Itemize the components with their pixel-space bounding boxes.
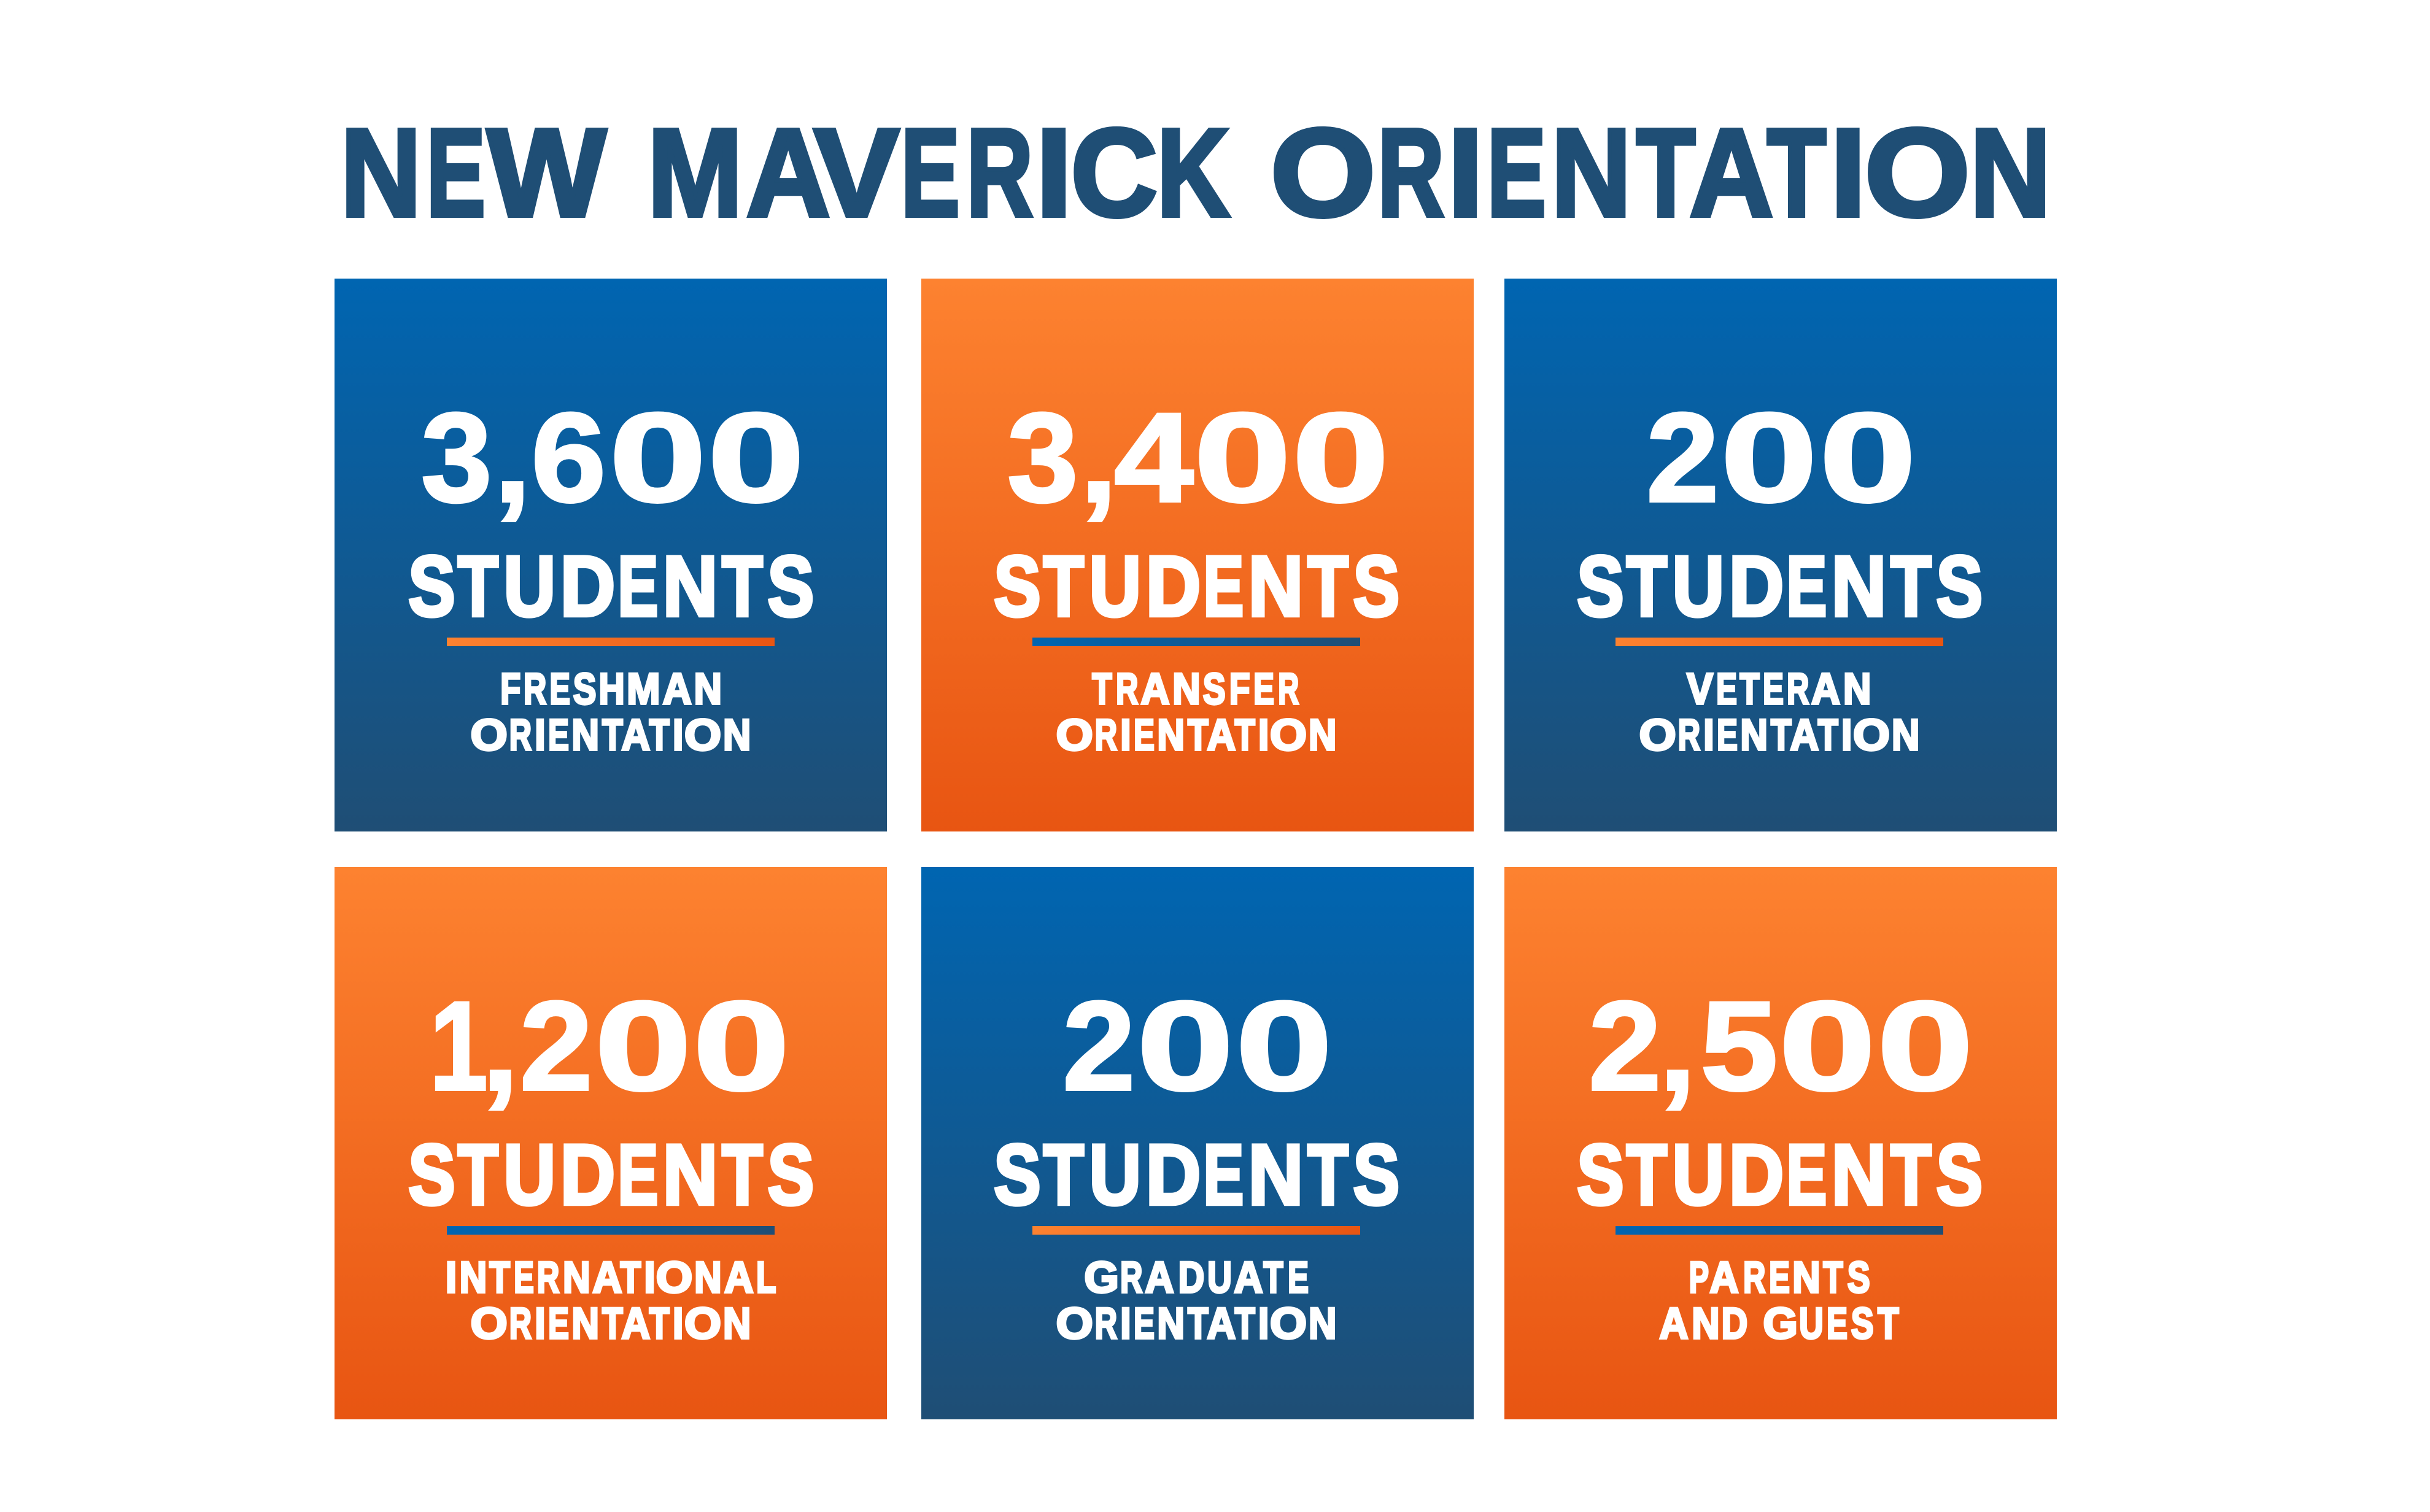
label line 1: transfer: F bbox=[1229, 665, 1250, 714]
heading: students: U bbox=[1089, 1127, 1141, 1222]
heading: students: N bbox=[1832, 538, 1886, 634]
label line 1: international: T bbox=[489, 1253, 510, 1302]
label line 2: orientation: O bbox=[1056, 711, 1093, 760]
label line 1: transfer: A bbox=[1140, 665, 1170, 714]
title: I bbox=[1448, 103, 1483, 243]
heading: students: S bbox=[1353, 1127, 1399, 1222]
heading: students: U bbox=[1672, 1127, 1724, 1222]
panel background bbox=[921, 867, 1474, 1419]
label line 2: orientation: I bbox=[1703, 711, 1714, 760]
label line 2: orientation: N bbox=[723, 711, 751, 760]
underline bar bbox=[1032, 638, 1360, 646]
label line 1: parents: N bbox=[1792, 1253, 1821, 1302]
heading: students: D bbox=[1146, 1127, 1201, 1222]
label line 1: freshman: E bbox=[550, 665, 570, 714]
label line 1: freshman: N bbox=[694, 665, 722, 714]
label line 2: and guest: N bbox=[1692, 1299, 1720, 1348]
label line 2: orientation: I bbox=[1120, 711, 1131, 760]
title: I bbox=[1036, 103, 1072, 243]
label line 1: international: R bbox=[537, 1253, 559, 1302]
label line 1: parents: R bbox=[1743, 1253, 1765, 1302]
title: E bbox=[1487, 103, 1546, 243]
label line 2: orientation: N bbox=[1157, 711, 1185, 760]
heading: students: U bbox=[1089, 538, 1141, 634]
title: T bbox=[1767, 103, 1826, 243]
label line 1: international: A bbox=[724, 1253, 754, 1302]
label line 2: orientation: R bbox=[1095, 711, 1117, 760]
label line 2: orientation: I bbox=[535, 711, 546, 760]
heading: students: E bbox=[617, 538, 658, 634]
label line 2: orientation: T bbox=[1188, 1299, 1209, 1348]
heading: students: S bbox=[1577, 1127, 1624, 1222]
label line 2: orientation: A bbox=[621, 711, 650, 760]
title: V bbox=[814, 103, 899, 243]
label line 2: orientation: E bbox=[1134, 1299, 1155, 1348]
title: N bbox=[341, 103, 421, 243]
heading: students: S bbox=[1936, 1127, 1983, 1222]
heading: students: S bbox=[994, 538, 1041, 634]
label line 1: graduate: A bbox=[1234, 1253, 1263, 1302]
number: 1,200: 2 bbox=[520, 975, 593, 1117]
panel background bbox=[1504, 867, 2057, 1419]
heading: students: S bbox=[767, 538, 814, 634]
label line 1: freshman: H bbox=[599, 665, 625, 714]
label line 1: international: E bbox=[514, 1253, 534, 1302]
panel background bbox=[335, 867, 887, 1419]
label line 2: orientation: O bbox=[471, 1299, 508, 1348]
panel: parents and guest bbox=[1504, 867, 2057, 1419]
title: R bbox=[967, 103, 1033, 243]
label line 1: veteran: E bbox=[1763, 665, 1784, 714]
number: 3,600: , bbox=[494, 387, 531, 528]
heading: students: E bbox=[1786, 1127, 1827, 1222]
heading: students: U bbox=[1672, 538, 1724, 634]
label line 1: international: N bbox=[460, 1253, 487, 1302]
number: 200: 0 bbox=[1720, 387, 1817, 528]
number: 2,500: 2 bbox=[1588, 975, 1662, 1117]
heading: students: T bbox=[1890, 538, 1932, 634]
heading: students: S bbox=[767, 1127, 814, 1222]
number: 2,500: 5 bbox=[1700, 975, 1778, 1117]
label line 1: international: T bbox=[621, 1253, 641, 1302]
label line 2: orientation: O bbox=[684, 711, 721, 760]
label line 1: parents: P bbox=[1689, 1253, 1709, 1302]
label line 2: orientation: E bbox=[548, 1299, 569, 1348]
label line 1: parents: T bbox=[1823, 1253, 1843, 1302]
label line 1: parents: S bbox=[1848, 1253, 1870, 1302]
panel background bbox=[921, 279, 1474, 831]
label line 1: veteran: N bbox=[1843, 665, 1871, 714]
label line 2: orientation: N bbox=[571, 1299, 599, 1348]
number: 3,400: 0 bbox=[1194, 387, 1291, 528]
label line 1: international: I bbox=[644, 1253, 656, 1302]
label line 2: and guest: U bbox=[1799, 1299, 1824, 1348]
title: A bbox=[746, 103, 830, 243]
heading: students: T bbox=[1307, 1127, 1348, 1222]
label line 2: orientation: R bbox=[509, 711, 532, 760]
label line 1: graduate: A bbox=[1145, 1253, 1174, 1302]
heading: students: S bbox=[408, 538, 455, 634]
title: O bbox=[1865, 103, 1970, 243]
heading: students: S bbox=[408, 1127, 455, 1222]
heading: students: D bbox=[560, 538, 615, 634]
heading: students: D bbox=[1146, 538, 1201, 634]
label line 1: graduate: E bbox=[1288, 1253, 1309, 1302]
heading: students: S bbox=[994, 1127, 1041, 1222]
panel background bbox=[335, 279, 887, 831]
label line 2: orientation: T bbox=[602, 1299, 623, 1348]
number: 3,600: 6 bbox=[531, 387, 606, 528]
label line 1: international: L bbox=[756, 1253, 776, 1302]
label line 2: orientation: T bbox=[1235, 711, 1255, 760]
title: O bbox=[1271, 103, 1376, 243]
label line 1: freshman: M bbox=[627, 665, 660, 714]
label line 2: and guest: A bbox=[1660, 1299, 1688, 1348]
label line 1: transfer: N bbox=[1172, 665, 1201, 714]
label line 2: orientation: O bbox=[1056, 1299, 1093, 1348]
label line 2: orientation: I bbox=[1841, 711, 1852, 760]
number: 1,200: 0 bbox=[693, 975, 790, 1117]
label line 1: transfer: S bbox=[1203, 665, 1226, 714]
label line 2: and guest: T bbox=[1878, 1299, 1899, 1348]
title: E bbox=[901, 103, 960, 243]
number: 3,600: 0 bbox=[708, 387, 805, 528]
label line 2: orientation: A bbox=[1207, 1299, 1236, 1348]
heading: students: T bbox=[1890, 1127, 1932, 1222]
label line 2: orientation: N bbox=[1740, 711, 1768, 760]
heading: students: S bbox=[1577, 538, 1624, 634]
heading: students: N bbox=[1248, 538, 1303, 634]
label line 2: orientation: R bbox=[1095, 1299, 1117, 1348]
label line 2: orientation: E bbox=[1134, 711, 1155, 760]
heading: students: T bbox=[1043, 1127, 1084, 1222]
label line 2: orientation: E bbox=[548, 711, 569, 760]
number: 200: 0 bbox=[1137, 975, 1234, 1117]
label line 2: orientation: O bbox=[471, 711, 508, 760]
heading: students: T bbox=[722, 538, 763, 634]
label line 2: orientation: O bbox=[1270, 711, 1307, 760]
label line 2: orientation: T bbox=[1235, 1299, 1255, 1348]
title: K bbox=[1157, 103, 1229, 243]
number: 200: 0 bbox=[1819, 387, 1916, 528]
label line 1: parents: E bbox=[1769, 1253, 1790, 1302]
heading: students: T bbox=[1627, 1127, 1667, 1222]
title: R bbox=[1378, 103, 1444, 243]
heading: students: U bbox=[503, 538, 555, 634]
heading: students: S bbox=[1936, 538, 1983, 634]
heading: students: E bbox=[1203, 538, 1244, 634]
label line 1: freshman: R bbox=[524, 665, 546, 714]
label line 1: graduate: U bbox=[1207, 1253, 1232, 1302]
label line 1: international: N bbox=[563, 1253, 590, 1302]
label line 2: orientation: N bbox=[1157, 1299, 1185, 1348]
number: 3,600: 0 bbox=[609, 387, 706, 528]
number: 2,500: 0 bbox=[1779, 975, 1876, 1117]
label line 2: orientation: I bbox=[1120, 1299, 1131, 1348]
heading: students: S bbox=[1353, 538, 1399, 634]
title: M bbox=[648, 103, 743, 243]
label line 1: veteran: T bbox=[1739, 665, 1759, 714]
label line 2: orientation: N bbox=[571, 711, 599, 760]
label line 2: orientation: O bbox=[1639, 711, 1676, 760]
label line 1: international: I bbox=[446, 1253, 457, 1302]
label line 2: and guest: E bbox=[1827, 1299, 1848, 1348]
label line 1: graduate: R bbox=[1120, 1253, 1142, 1302]
panel background bbox=[1504, 279, 2057, 831]
underline bar bbox=[447, 1226, 775, 1235]
label line 2: orientation: N bbox=[1309, 711, 1336, 760]
title: E bbox=[427, 103, 486, 243]
heading: students: E bbox=[1203, 1127, 1244, 1222]
label line 1: transfer: R bbox=[1116, 665, 1138, 714]
heading: students: D bbox=[1729, 1127, 1784, 1222]
label line 2: orientation: T bbox=[1818, 711, 1838, 760]
heading: students: T bbox=[1043, 538, 1084, 634]
number: 3,600: 3 bbox=[421, 387, 492, 528]
title: N bbox=[1552, 103, 1631, 243]
label line 1: transfer: T bbox=[1092, 665, 1112, 714]
title: I bbox=[1830, 103, 1866, 243]
label line 2: orientation: A bbox=[621, 1299, 650, 1348]
label line 2: orientation: A bbox=[1790, 711, 1819, 760]
panel: transfer orientation bbox=[921, 279, 1474, 831]
label line 2: and guest: G bbox=[1763, 1299, 1798, 1348]
title: W bbox=[487, 103, 606, 243]
label line 2: orientation: I bbox=[673, 711, 683, 760]
label line 1: veteran: V bbox=[1687, 665, 1713, 714]
heading: students: N bbox=[663, 1127, 718, 1222]
number: 200: 0 bbox=[1236, 975, 1333, 1117]
panel: freshman orientation bbox=[335, 279, 887, 831]
number: 1,200: 1 bbox=[430, 975, 488, 1117]
label line 1: veteran: R bbox=[1787, 665, 1809, 714]
label line 1: parents: A bbox=[1710, 1253, 1738, 1302]
label line 1: transfer: R bbox=[1278, 665, 1299, 714]
label line 1: veteran: A bbox=[1811, 665, 1840, 714]
title: N bbox=[1970, 103, 2051, 243]
title: T bbox=[1636, 103, 1695, 243]
label line 1: freshman: F bbox=[500, 665, 520, 714]
heading: students: T bbox=[1627, 538, 1667, 634]
label line 2: orientation: I bbox=[1258, 1299, 1269, 1348]
heading: students: N bbox=[663, 538, 718, 634]
number: 3,400: 4 bbox=[1114, 387, 1193, 528]
panel: veteran orientation bbox=[1504, 279, 2057, 831]
label line 1: international: O bbox=[656, 1253, 692, 1302]
label line 2: orientation: N bbox=[1309, 1299, 1336, 1348]
heading: students: U bbox=[503, 1127, 555, 1222]
label line 2: orientation: I bbox=[535, 1299, 546, 1348]
label line 2: orientation: T bbox=[1771, 711, 1792, 760]
heading: students: N bbox=[1248, 1127, 1303, 1222]
underline bar bbox=[1032, 1226, 1360, 1235]
label line 2: orientation: I bbox=[673, 1299, 683, 1348]
label line 2: orientation: T bbox=[649, 1299, 670, 1348]
label line 2: orientation: R bbox=[1678, 711, 1700, 760]
underline bar bbox=[447, 638, 775, 646]
label line 1: freshman: A bbox=[663, 665, 692, 714]
heading: students: D bbox=[560, 1127, 615, 1222]
number: 3,400: 3 bbox=[1007, 387, 1078, 528]
label line 1: transfer: E bbox=[1253, 665, 1274, 714]
number: 200: 2 bbox=[1062, 975, 1136, 1117]
heading: students: E bbox=[617, 1127, 658, 1222]
label line 1: international: N bbox=[694, 1253, 722, 1302]
label line 2: orientation: N bbox=[723, 1299, 751, 1348]
label line 2: and guest: S bbox=[1851, 1299, 1874, 1348]
label line 2: orientation: A bbox=[1207, 711, 1236, 760]
label line 2: orientation: O bbox=[1853, 711, 1890, 760]
heading: students: D bbox=[1729, 538, 1784, 634]
label line 2: orientation: T bbox=[649, 711, 670, 760]
number: 3,400: , bbox=[1080, 387, 1117, 528]
number: 1,200: 0 bbox=[595, 975, 692, 1117]
panel: international orientation bbox=[335, 867, 887, 1419]
label line 2: orientation: O bbox=[684, 1299, 721, 1348]
label line 1: graduate: G bbox=[1084, 1253, 1119, 1302]
panel: graduate orientation bbox=[921, 867, 1474, 1419]
label line 1: freshman: S bbox=[573, 665, 597, 714]
title: C bbox=[1071, 103, 1158, 243]
label line 2: orientation: N bbox=[1892, 711, 1919, 760]
label line 1: veteran: E bbox=[1716, 665, 1737, 714]
label line 1: graduate: T bbox=[1263, 1253, 1283, 1302]
heading: students: E bbox=[1786, 538, 1827, 634]
label line 2: orientation: T bbox=[1188, 711, 1209, 760]
underline bar bbox=[1615, 1226, 1943, 1235]
number: 2,500: 0 bbox=[1877, 975, 1973, 1117]
label line 2: orientation: I bbox=[1258, 711, 1269, 760]
label line 2: orientation: R bbox=[509, 1299, 532, 1348]
heading: students: T bbox=[458, 1127, 498, 1222]
label line 2: orientation: O bbox=[1270, 1299, 1307, 1348]
heading: students: T bbox=[1307, 538, 1348, 634]
label line 2: and guest: D bbox=[1722, 1299, 1747, 1348]
number: 200: 2 bbox=[1646, 387, 1719, 528]
underline bar bbox=[1615, 638, 1943, 646]
label line 1: international: A bbox=[592, 1253, 622, 1302]
label line 2: orientation: T bbox=[602, 711, 623, 760]
number: 3,400: 0 bbox=[1292, 387, 1389, 528]
title: A bbox=[1690, 103, 1773, 243]
number: 1,200: , bbox=[482, 975, 519, 1117]
heading: students: T bbox=[458, 538, 498, 634]
label line 1: graduate: D bbox=[1178, 1253, 1204, 1302]
heading: students: N bbox=[1832, 1127, 1886, 1222]
number: 2,500: , bbox=[1659, 975, 1696, 1117]
label line 2: orientation: E bbox=[1717, 711, 1738, 760]
heading: students: T bbox=[722, 1127, 763, 1222]
